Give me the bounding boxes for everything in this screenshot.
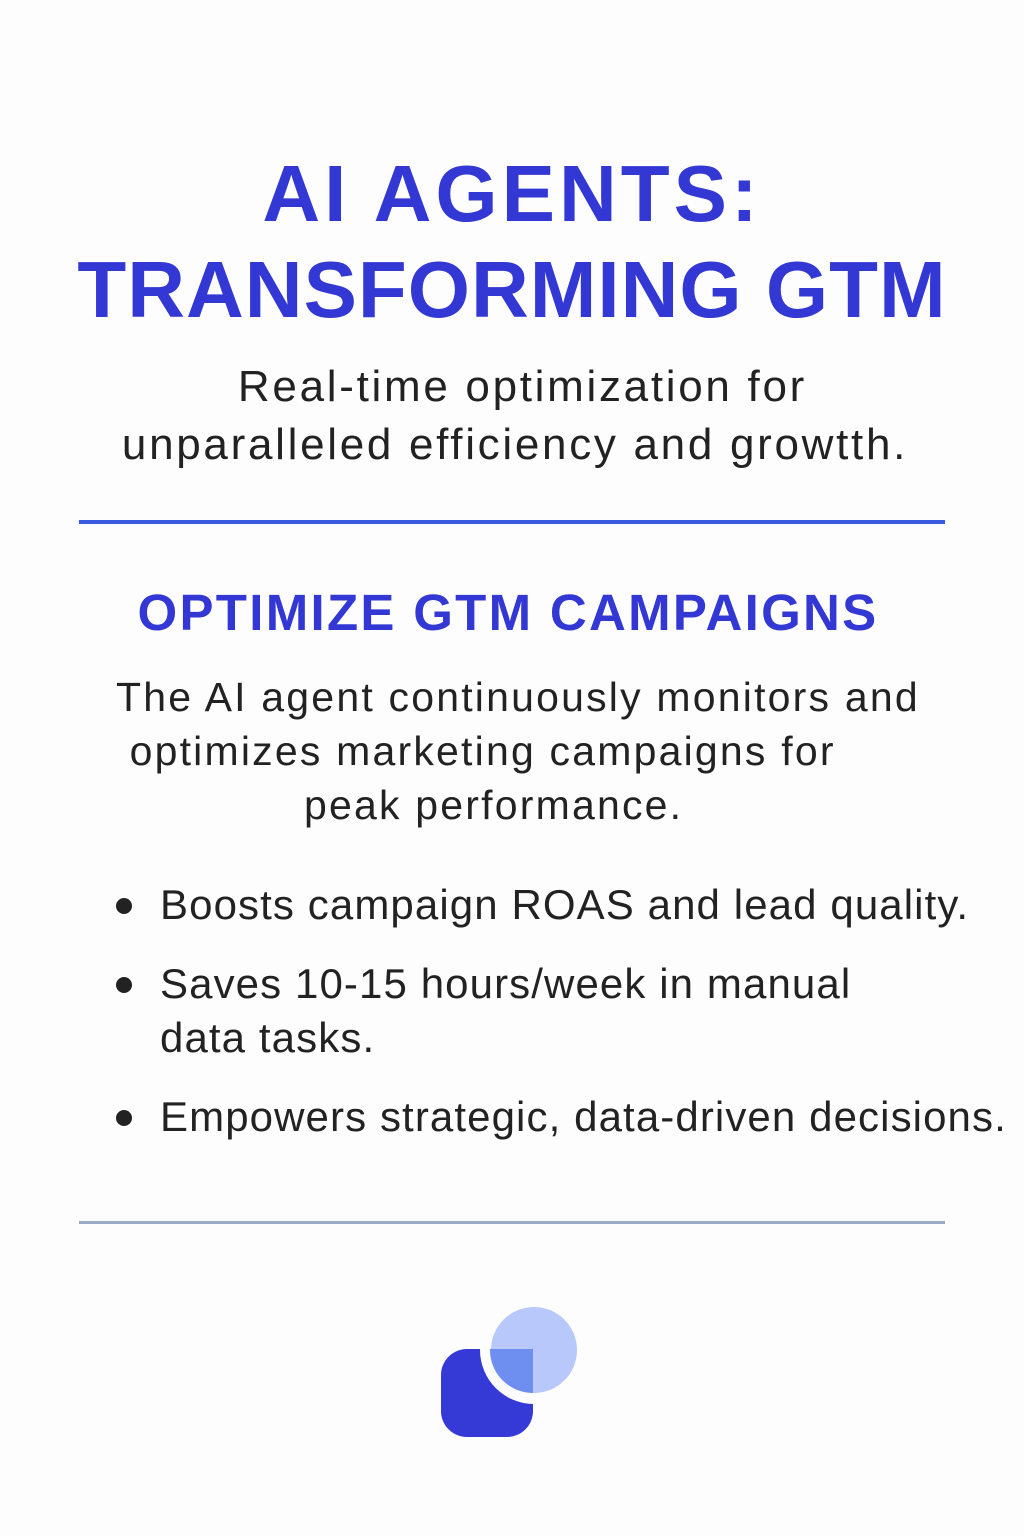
subtitle: [122, 362, 908, 469]
bullet list: data tasks.: [160, 1014, 375, 1061]
bullet list: [116, 881, 1007, 1140]
bullet list: Boosts campaign ROAS and lead quality.: [160, 881, 969, 928]
heading: OPTIMIZE GTM CAMPAIGNS: [138, 584, 878, 641]
paragraph: [116, 674, 920, 828]
icon: logo: [441, 1307, 577, 1437]
title: TRANSFORMING GTM: [77, 245, 947, 334]
title: [77, 149, 947, 334]
divider blue: [79, 520, 945, 524]
subtitle: unparalleled efficiency and growtth.: [122, 420, 908, 469]
divider gray: [79, 1221, 945, 1224]
subtitle: Real-time optimization for: [238, 362, 807, 411]
bullet list: Empowers strategic, data-driven decisions.: [160, 1093, 1007, 1140]
paragraph: peak performance.: [304, 782, 683, 828]
title: AI AGENTS:: [262, 149, 762, 238]
paragraph: The AI agent continuously monitors and: [116, 674, 920, 720]
paragraph: optimizes marketing campaigns for: [130, 728, 836, 774]
bullet list: Saves 10-15 hours/week in manual: [160, 960, 851, 1007]
